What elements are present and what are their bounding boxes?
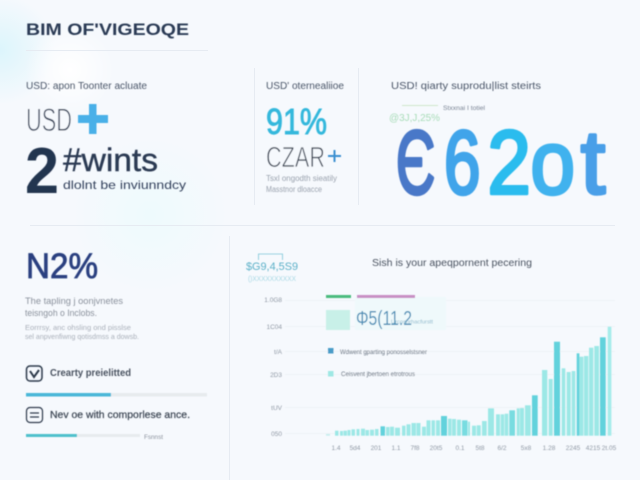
large numeral: 2 [25, 134, 59, 207]
numeral unit: #wints [63, 142, 158, 178]
y axis labels: 1.0G8 [264, 297, 282, 304]
USD thin figure: USD [26, 102, 72, 138]
x axis labels: 1.1 [391, 445, 401, 452]
panel: big figure [389, 81, 605, 214]
x axis labels: 5x8 [521, 445, 532, 452]
progress bar [26, 393, 207, 396]
y axis labels: 2D3 [270, 372, 282, 379]
progress label: Fsnnst [144, 435, 163, 441]
x axis labels: 1.4 [331, 445, 341, 452]
chart value: ()XXXXXXXXXX [248, 276, 296, 283]
y axis labels: tUV [271, 405, 283, 412]
x axis labels: 2245 [566, 445, 581, 452]
x axis labels: 201 [371, 445, 382, 452]
big gradient figure [396, 114, 605, 214]
x axis labels: 2t.05 [602, 445, 617, 452]
icon: small plus [328, 150, 341, 162]
big gradient figure: o [530, 114, 575, 214]
panel: lower left summary [25, 247, 207, 441]
y axis labels [264, 297, 283, 438]
legend callout [326, 295, 446, 330]
icon: plus [78, 104, 108, 134]
percentage value: 91% [266, 101, 327, 142]
caption: Tsxl ongodth sieatily [266, 174, 337, 183]
numeral caption: dlolnt be inviunndcy [63, 178, 186, 192]
x axis labels: 1.28 [543, 445, 556, 452]
icon: list badge [26, 408, 42, 422]
panel: USD headline metric [25, 81, 186, 207]
title: BIM OF'VIGEOQE [26, 20, 189, 39]
feature label: Nev oe with comporlese ance. [50, 409, 190, 421]
icon: check badge [26, 366, 42, 381]
x axis labels: 6/2 [497, 445, 507, 452]
feature label: Crearty preielitted [50, 368, 131, 379]
y axis labels: 1C04 [266, 324, 282, 331]
x axis labels: 4215 [586, 445, 601, 452]
description: teisngoh o Inclobs. [25, 308, 97, 319]
green accent line [402, 105, 438, 106]
caption: Masstnor dloacce [266, 185, 322, 194]
description [25, 296, 123, 319]
big gradient figure: t [581, 114, 605, 214]
y axis labels: 050 [271, 431, 282, 438]
x axis labels: 5d4 [350, 445, 361, 452]
progress bar [26, 434, 140, 437]
x axis labels: 5t8 [475, 445, 485, 452]
metric label: USD: apon Toonter acluate [26, 81, 147, 92]
chart title: Sish is your apeqpornent pecering [372, 258, 532, 269]
bar series [326, 327, 611, 436]
percentage heading: N2% [26, 247, 98, 286]
legend: dark series: Wdwent gparting ponosselstsner [340, 349, 428, 356]
small note: Stxxnai I totiel [443, 106, 485, 112]
caption [266, 174, 337, 194]
description: The tapling j oonjvnetes [25, 296, 123, 307]
chart value [246, 254, 298, 283]
panel: chart [246, 254, 617, 452]
green delta: @3J,J,25% [389, 113, 440, 124]
chart value: $G9,4,5S9 [246, 261, 298, 273]
metric label: USD! qiarty suprodu|list steirts [391, 81, 541, 92]
fine print: Eorrrsy, anc ohsling ond pisslse [25, 323, 131, 332]
x axis labels [331, 445, 617, 452]
x axis labels: 7f8 [410, 445, 420, 452]
fine print [25, 323, 139, 341]
big gradient figure: Є [396, 114, 435, 214]
x axis labels: 20t5 [430, 445, 443, 452]
big gradient figure: 6 [444, 114, 480, 214]
big gradient figure: 2 [488, 114, 531, 214]
metric label: USD' oternealiioe [266, 81, 344, 92]
x axis labels: 0.1 [455, 445, 465, 452]
panel: percentage metric [266, 81, 344, 194]
legend: light series: Ceisvent jbertoen etrotrous [341, 371, 416, 378]
legend callout: Φ5(11.2 [356, 308, 412, 330]
fine print: sel anpvenfiwng qotisdmss a dowsb. [25, 332, 139, 341]
y axis labels: t/A [274, 349, 283, 356]
CAGR value: CZAR [266, 142, 325, 174]
grid lines [285, 300, 615, 434]
legend callout: Urcosnrhacfurstt [391, 320, 433, 326]
